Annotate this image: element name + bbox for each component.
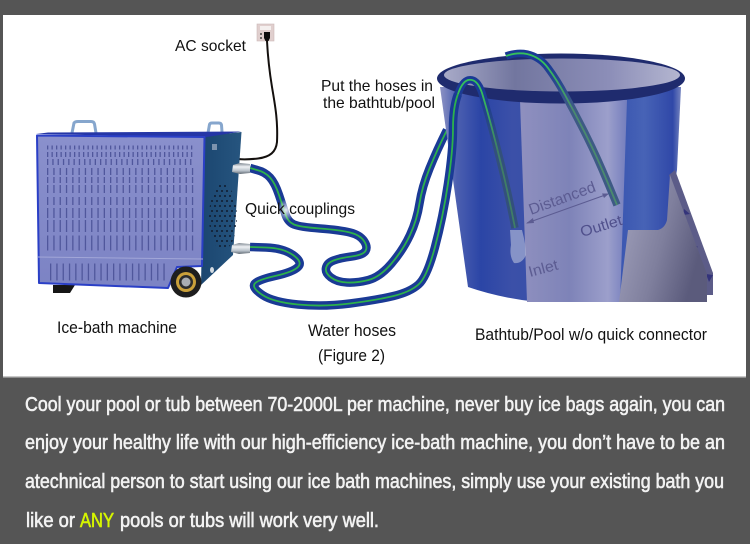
label: figure 2: (Figure 2) [318,346,385,365]
ladder steps [619,170,713,302]
fan grille [209,185,237,247]
water hose 2 (inlet) [250,80,515,306]
machine side panel [201,132,242,285]
quick coupling lower [231,243,250,254]
water hose 1 inside tub (outlet) [506,53,617,205]
icon: AC wall socket [257,24,274,41]
vent slots [47,148,195,272]
highlighted word ANY: ANY [80,509,114,532]
tub body [440,87,681,302]
tub light centre panel [520,100,627,302]
power cable [215,41,277,159]
machine top edge [36,132,242,138]
tub text: Distanced with arrow: Distanced [527,179,598,219]
white diagram panel [3,15,746,376]
label: put the hoses in the bathtub: Put the hoses in [321,78,433,95]
bathtub [437,54,713,302]
label: bathtub/pool: Bathtub/Pool w/o quick connector [475,325,707,344]
ice-bath machine [36,122,250,298]
tub text: Inlet: Inlet [527,256,561,281]
feet [53,285,75,293]
description text [25,393,725,532]
label: quick couplings: Quick couplings [245,201,355,218]
bolt [210,267,214,273]
description text: like or [26,509,75,532]
tub text: Outlet: Outlet [578,212,625,241]
handles [72,122,96,133]
wheel [170,266,202,298]
label: AC socket: AC socket [175,38,247,55]
quick coupling upper [232,163,250,174]
label: put the hoses in the bathtub [321,78,435,112]
label: ice-bath machine: Ice-bath machine [57,318,177,337]
tub rim [437,54,685,104]
machine front panel [37,136,204,288]
description text: pools or tubs will work very well. [120,509,379,532]
label: put the hoses in the bathtub: the bathtub/pool [323,95,435,112]
water hose 1 outside tub [250,130,447,283]
hose inlet strainer [510,230,526,263]
power inlet [212,144,217,150]
highlight fade on hose behind label [277,199,295,221]
label: water hoses: Water hoses [308,321,396,340]
